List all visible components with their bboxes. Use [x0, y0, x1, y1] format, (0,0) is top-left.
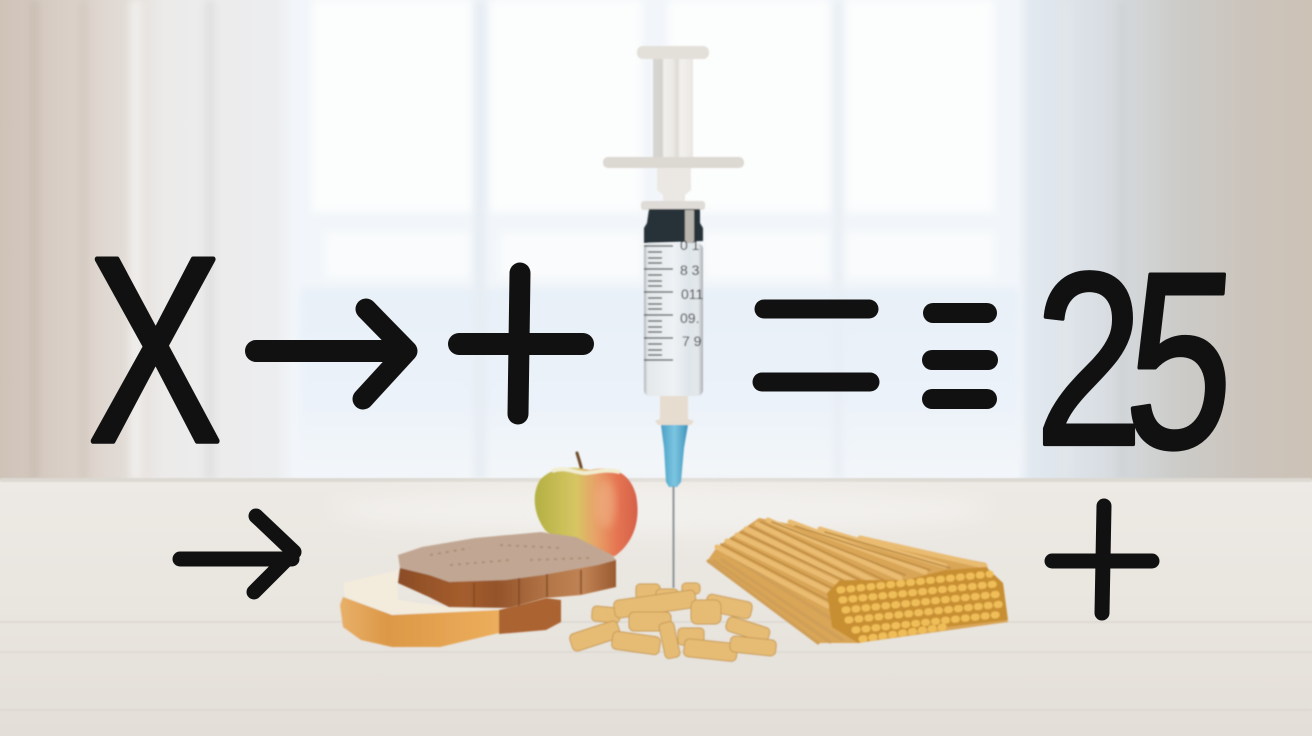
arrow: lower: [180, 516, 294, 592]
symbol: plus: [459, 273, 583, 414]
syringe plunger: [603, 46, 744, 202]
number: 25: [1035, 221, 1244, 501]
needle hub: [655, 396, 694, 487]
apple: [535, 453, 638, 557]
syringe numbers: 011: [681, 286, 704, 302]
syringe barrel: [641, 201, 705, 396]
background: curtains and window: [0, 0, 1312, 490]
syringe scale: [644, 246, 673, 360]
syringe: [603, 46, 744, 588]
syringe numbers: 09.: [680, 310, 699, 326]
syringe numbers: 8 3: [680, 262, 700, 278]
penne pasta: [568, 583, 777, 662]
needle: [672, 486, 674, 588]
symbol: lower plus: [1052, 506, 1152, 613]
syringe numbers: 0 1: [680, 237, 700, 253]
spaghetti bundle: [708, 518, 1008, 643]
arrow: top: [256, 309, 407, 399]
symbol: equals: [762, 309, 870, 382]
bread: white slice: [340, 570, 561, 647]
spaghetti cut ends: [827, 567, 1008, 643]
table top: [0, 478, 1312, 736]
bread: brown slice: [398, 532, 616, 608]
symbol: X: X: [88, 202, 222, 497]
symbol: triple bar: [932, 313, 988, 399]
number: 25: 2: [1035, 222, 1143, 497]
syringe numbers: 7 9: [682, 333, 702, 349]
number: 25: 5: [1118, 221, 1244, 501]
syringe numbers: [680, 237, 704, 349]
